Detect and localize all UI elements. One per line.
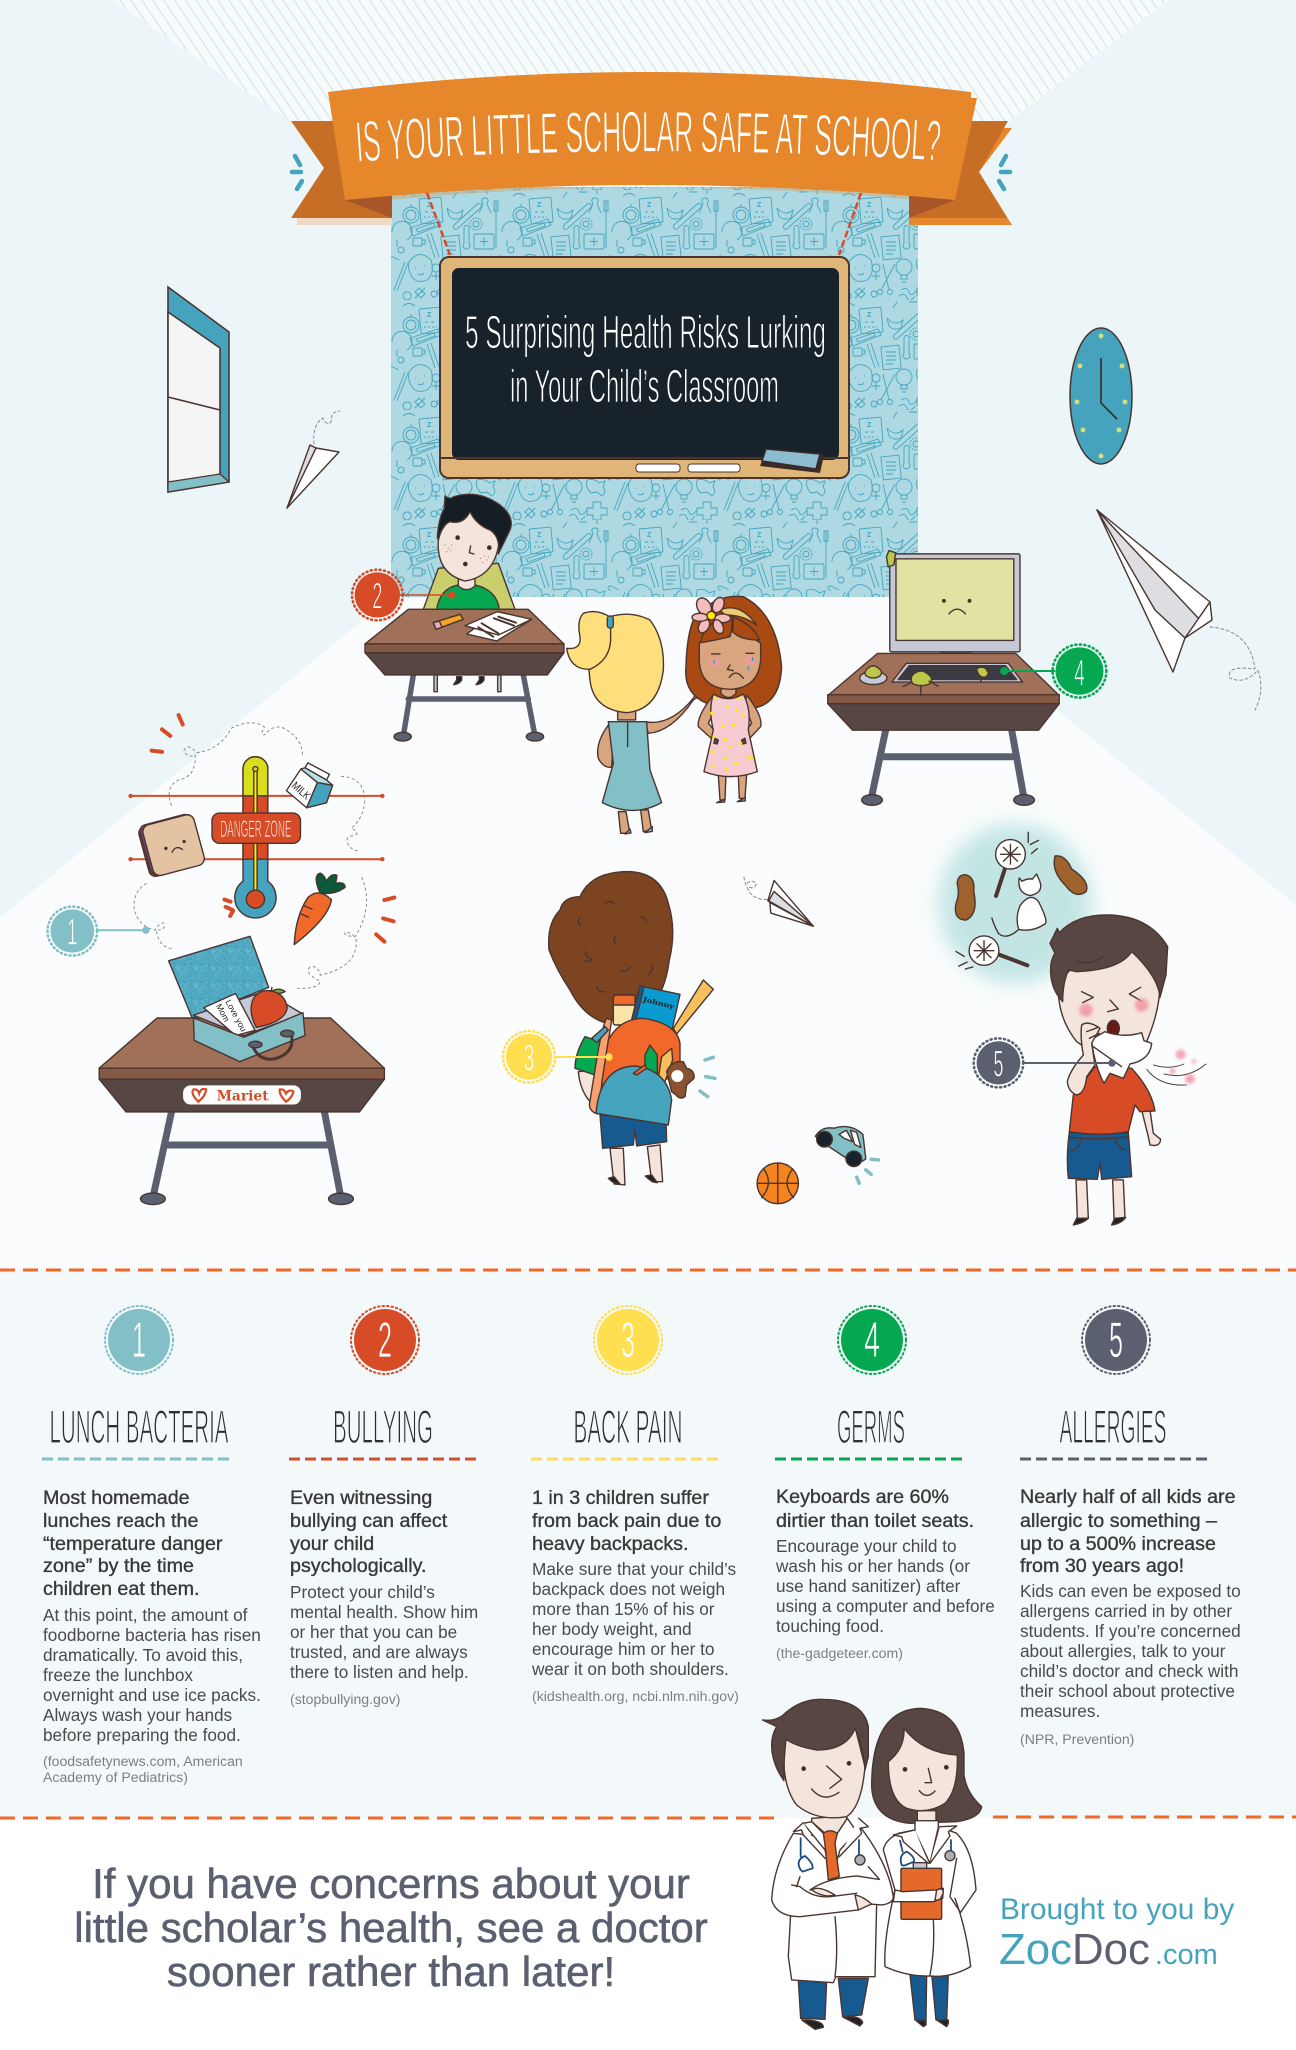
text: wash his or her hands (or <box>775 1556 970 1576</box>
text: backpack does not weigh <box>532 1579 725 1599</box>
badge 2 <box>352 570 455 620</box>
dashes <box>289 1458 476 1460</box>
text: (NPR, Prevention) <box>1020 1731 1134 1747</box>
lunchbox: Mom <box>214 1002 232 1023</box>
ZocDoc credit <box>999 1893 1234 1974</box>
text: up to a 500% increase <box>1020 1533 1216 1555</box>
number badge 1: 1 <box>132 1312 146 1368</box>
chalkboard <box>440 257 849 478</box>
badge 3: 3 <box>524 1038 534 1079</box>
toy car <box>815 1127 866 1167</box>
text: (the-gadgeteer.com) <box>776 1645 903 1661</box>
text: allergic to something – <box>1020 1510 1217 1532</box>
number badge 4: 4 <box>864 1312 880 1368</box>
text: more than 15% of his or <box>532 1599 715 1619</box>
dress dots and tears <box>709 656 756 771</box>
car ticks <box>857 1159 879 1183</box>
text: allergens carried in by other <box>1020 1601 1232 1621</box>
number badge 3: 3 <box>621 1312 635 1368</box>
text: heavy backpacks. <box>532 1533 688 1555</box>
dashes <box>775 1458 963 1460</box>
text: from back pain due to <box>532 1510 721 1532</box>
text: your child <box>290 1533 374 1555</box>
woman doctor <box>872 1708 982 2027</box>
badge 3 <box>503 1031 555 1082</box>
basketball <box>757 1163 798 1204</box>
text: Kids can even be exposed to <box>1020 1581 1241 1601</box>
number badge 5: 5 <box>1109 1312 1123 1368</box>
sneezing boy <box>1050 915 1206 1225</box>
text: (kidshealth.org, ncbi.nlm.nih.gov) <box>532 1688 739 1704</box>
patterned back wall <box>391 187 918 597</box>
desk 1 <box>99 1018 384 1205</box>
boy at desk <box>423 494 515 692</box>
backpack kid <box>549 872 715 1185</box>
text: trusted, and are always <box>290 1642 468 1662</box>
lunchbox <box>169 936 305 1062</box>
large paper plane <box>1097 510 1261 710</box>
text: use hand sanitizer) after <box>776 1576 961 1596</box>
text: their school about protective <box>1020 1681 1235 1701</box>
desk 2 <box>365 609 564 741</box>
text: Academy of Pediatrics) <box>43 1769 188 1785</box>
dashes <box>1020 1458 1207 1460</box>
danger lines <box>129 795 384 860</box>
name plate: Mariet <box>217 1089 269 1104</box>
text: dirtier than toilet seats. <box>776 1510 974 1532</box>
closing message: sooner rather than later! <box>167 1948 615 1995</box>
text: before preparing the food. <box>43 1725 241 1745</box>
clock <box>1070 328 1132 464</box>
text: Nearly half of all kids are <box>1020 1486 1236 1508</box>
small paper plane <box>287 411 340 508</box>
text: dramatically. To avoid this, <box>43 1645 243 1665</box>
milk carton <box>286 763 333 808</box>
text <box>290 1487 478 1707</box>
banner title: IS YOUR LITTLE SCHOLAR SAFE AT SCHOOL? <box>356 112 940 162</box>
window <box>168 287 229 492</box>
text <box>775 1486 995 1661</box>
text: from 30 years ago! <box>1020 1555 1184 1577</box>
column 1: lunch bacteria: LUNCH BACTERIA <box>50 1400 229 1453</box>
carrot <box>294 873 345 945</box>
paper plane 3 <box>744 875 813 926</box>
text: Make sure that your child’s <box>532 1559 736 1579</box>
crying red-haired girl <box>686 595 782 803</box>
badge 4 <box>1000 644 1106 698</box>
ZocDoc credit: ZocDoc.com <box>999 1925 1218 1974</box>
section dashed borders <box>0 1270 1296 1818</box>
text: measures. <box>1020 1701 1100 1721</box>
column 5: allergies <box>1020 1306 1241 1747</box>
text: child’s doctor and check with <box>1020 1661 1238 1681</box>
text: (foodsafetynews.com, American <box>43 1753 243 1769</box>
text: “temperature danger <box>43 1533 223 1555</box>
dashes <box>531 1458 718 1460</box>
text: there to listen and help. <box>290 1662 469 1682</box>
text: foodborne bacteria has risen <box>43 1625 261 1645</box>
text: freeze the lunchbox <box>43 1665 193 1685</box>
curly dashes <box>134 723 367 988</box>
column 4: germs <box>775 1306 995 1661</box>
column 3: back pain <box>531 1306 739 1704</box>
freckles <box>444 544 489 563</box>
lunch bacteria scene: DANGER ZONE <box>220 816 291 843</box>
number badge 2: 2 <box>378 1312 392 1368</box>
badge 5 connector <box>1022 1059 1116 1067</box>
text: Even witnessing <box>290 1487 432 1509</box>
chalkboard: 5 Surprising Health Risks Lurking <box>465 306 826 358</box>
banner title <box>290 72 1012 225</box>
badge 5: 5 <box>994 1044 1003 1084</box>
text <box>43 1487 261 1785</box>
text: encourage him or her to <box>532 1639 714 1659</box>
text: touching food. <box>776 1616 884 1636</box>
backpack kid: Johnny <box>641 994 676 1011</box>
number badge 1 <box>105 1306 173 1374</box>
text: children eat them. <box>43 1578 200 1600</box>
column 2: bullying <box>289 1306 478 1707</box>
text: Always wash your hands <box>43 1705 232 1725</box>
number badge 3 <box>594 1306 662 1374</box>
badge 5 <box>974 1038 1023 1087</box>
number badge 5 <box>1082 1306 1150 1374</box>
closing message: If you have concerns about your <box>92 1860 690 1907</box>
text: Encourage your child to <box>776 1536 957 1556</box>
allergens <box>955 832 1087 969</box>
danger zone label <box>212 813 300 843</box>
text: students. If you’re concerned <box>1020 1621 1241 1641</box>
blonde girl <box>567 612 700 834</box>
lunchbox: Love you <box>223 998 249 1033</box>
bullying scene <box>352 494 782 834</box>
thermometer <box>235 757 276 918</box>
milk carton: MILK <box>289 780 313 803</box>
text: lunches reach the <box>43 1510 198 1532</box>
badge 1: 1 <box>67 912 77 952</box>
monitor <box>886 551 1020 663</box>
text: 1 in 3 children suffer <box>532 1487 709 1509</box>
red ticks <box>152 715 394 942</box>
column 2: bullying: BULLYING <box>333 1400 433 1453</box>
lunch bacteria scene <box>48 715 555 1205</box>
ZocDoc credit: Brought to you by <box>1000 1893 1234 1926</box>
badge 2: 2 <box>372 575 382 616</box>
closing message: little scholar’s health, see a doctor <box>74 1904 708 1951</box>
computer desk scene <box>744 551 1106 1204</box>
text: psychologically. <box>290 1555 426 1577</box>
text: wear it on both shoulders. <box>531 1659 729 1679</box>
text: mental health. Show him <box>290 1602 478 1622</box>
text <box>531 1487 739 1704</box>
badge 1 <box>48 907 150 956</box>
sandwich <box>137 812 206 878</box>
text: or her that you can be <box>290 1622 457 1642</box>
text <box>1020 1486 1241 1747</box>
sneeze spray and cheeks <box>1079 998 1196 1084</box>
chalkboard: in Your Child’s Classroom <box>510 360 779 412</box>
number badge 4 <box>838 1306 906 1374</box>
closing message <box>74 1860 708 1995</box>
column 4: germs: GERMS <box>837 1400 905 1453</box>
name plate <box>183 1085 301 1105</box>
text: At this point, the amount of <box>43 1605 248 1625</box>
text: using a computer and before <box>776 1596 995 1616</box>
allergy cloud <box>939 824 1091 983</box>
text: Keyboards are 60% <box>776 1486 949 1508</box>
number badge 2 <box>351 1306 419 1374</box>
text: Protect your child’s <box>290 1582 435 1602</box>
info panel background <box>0 1269 1296 1818</box>
desk 4 <box>828 653 1059 805</box>
text: about allergies, talk to your <box>1020 1641 1226 1661</box>
doctors <box>763 1699 982 2029</box>
text: bullying can affect <box>290 1510 448 1532</box>
man doctor <box>763 1699 893 2029</box>
text: (stopbullying.gov) <box>290 1691 400 1707</box>
backpack ticks <box>700 1057 715 1097</box>
badge 3 connector <box>555 1053 613 1061</box>
chalkboard strings <box>427 193 861 255</box>
text: zone” by the time <box>43 1555 194 1577</box>
column 3: back pain: BACK PAIN <box>574 1400 682 1453</box>
badge 4: 4 <box>1074 653 1085 693</box>
dashes <box>42 1458 229 1460</box>
text: her body weight, and <box>532 1619 692 1639</box>
text: overnight and use ice packs. <box>43 1685 261 1705</box>
classroom background <box>0 0 1296 1270</box>
text: Most homemade <box>43 1487 190 1509</box>
column 1: lunch bacteria <box>42 1306 261 1785</box>
